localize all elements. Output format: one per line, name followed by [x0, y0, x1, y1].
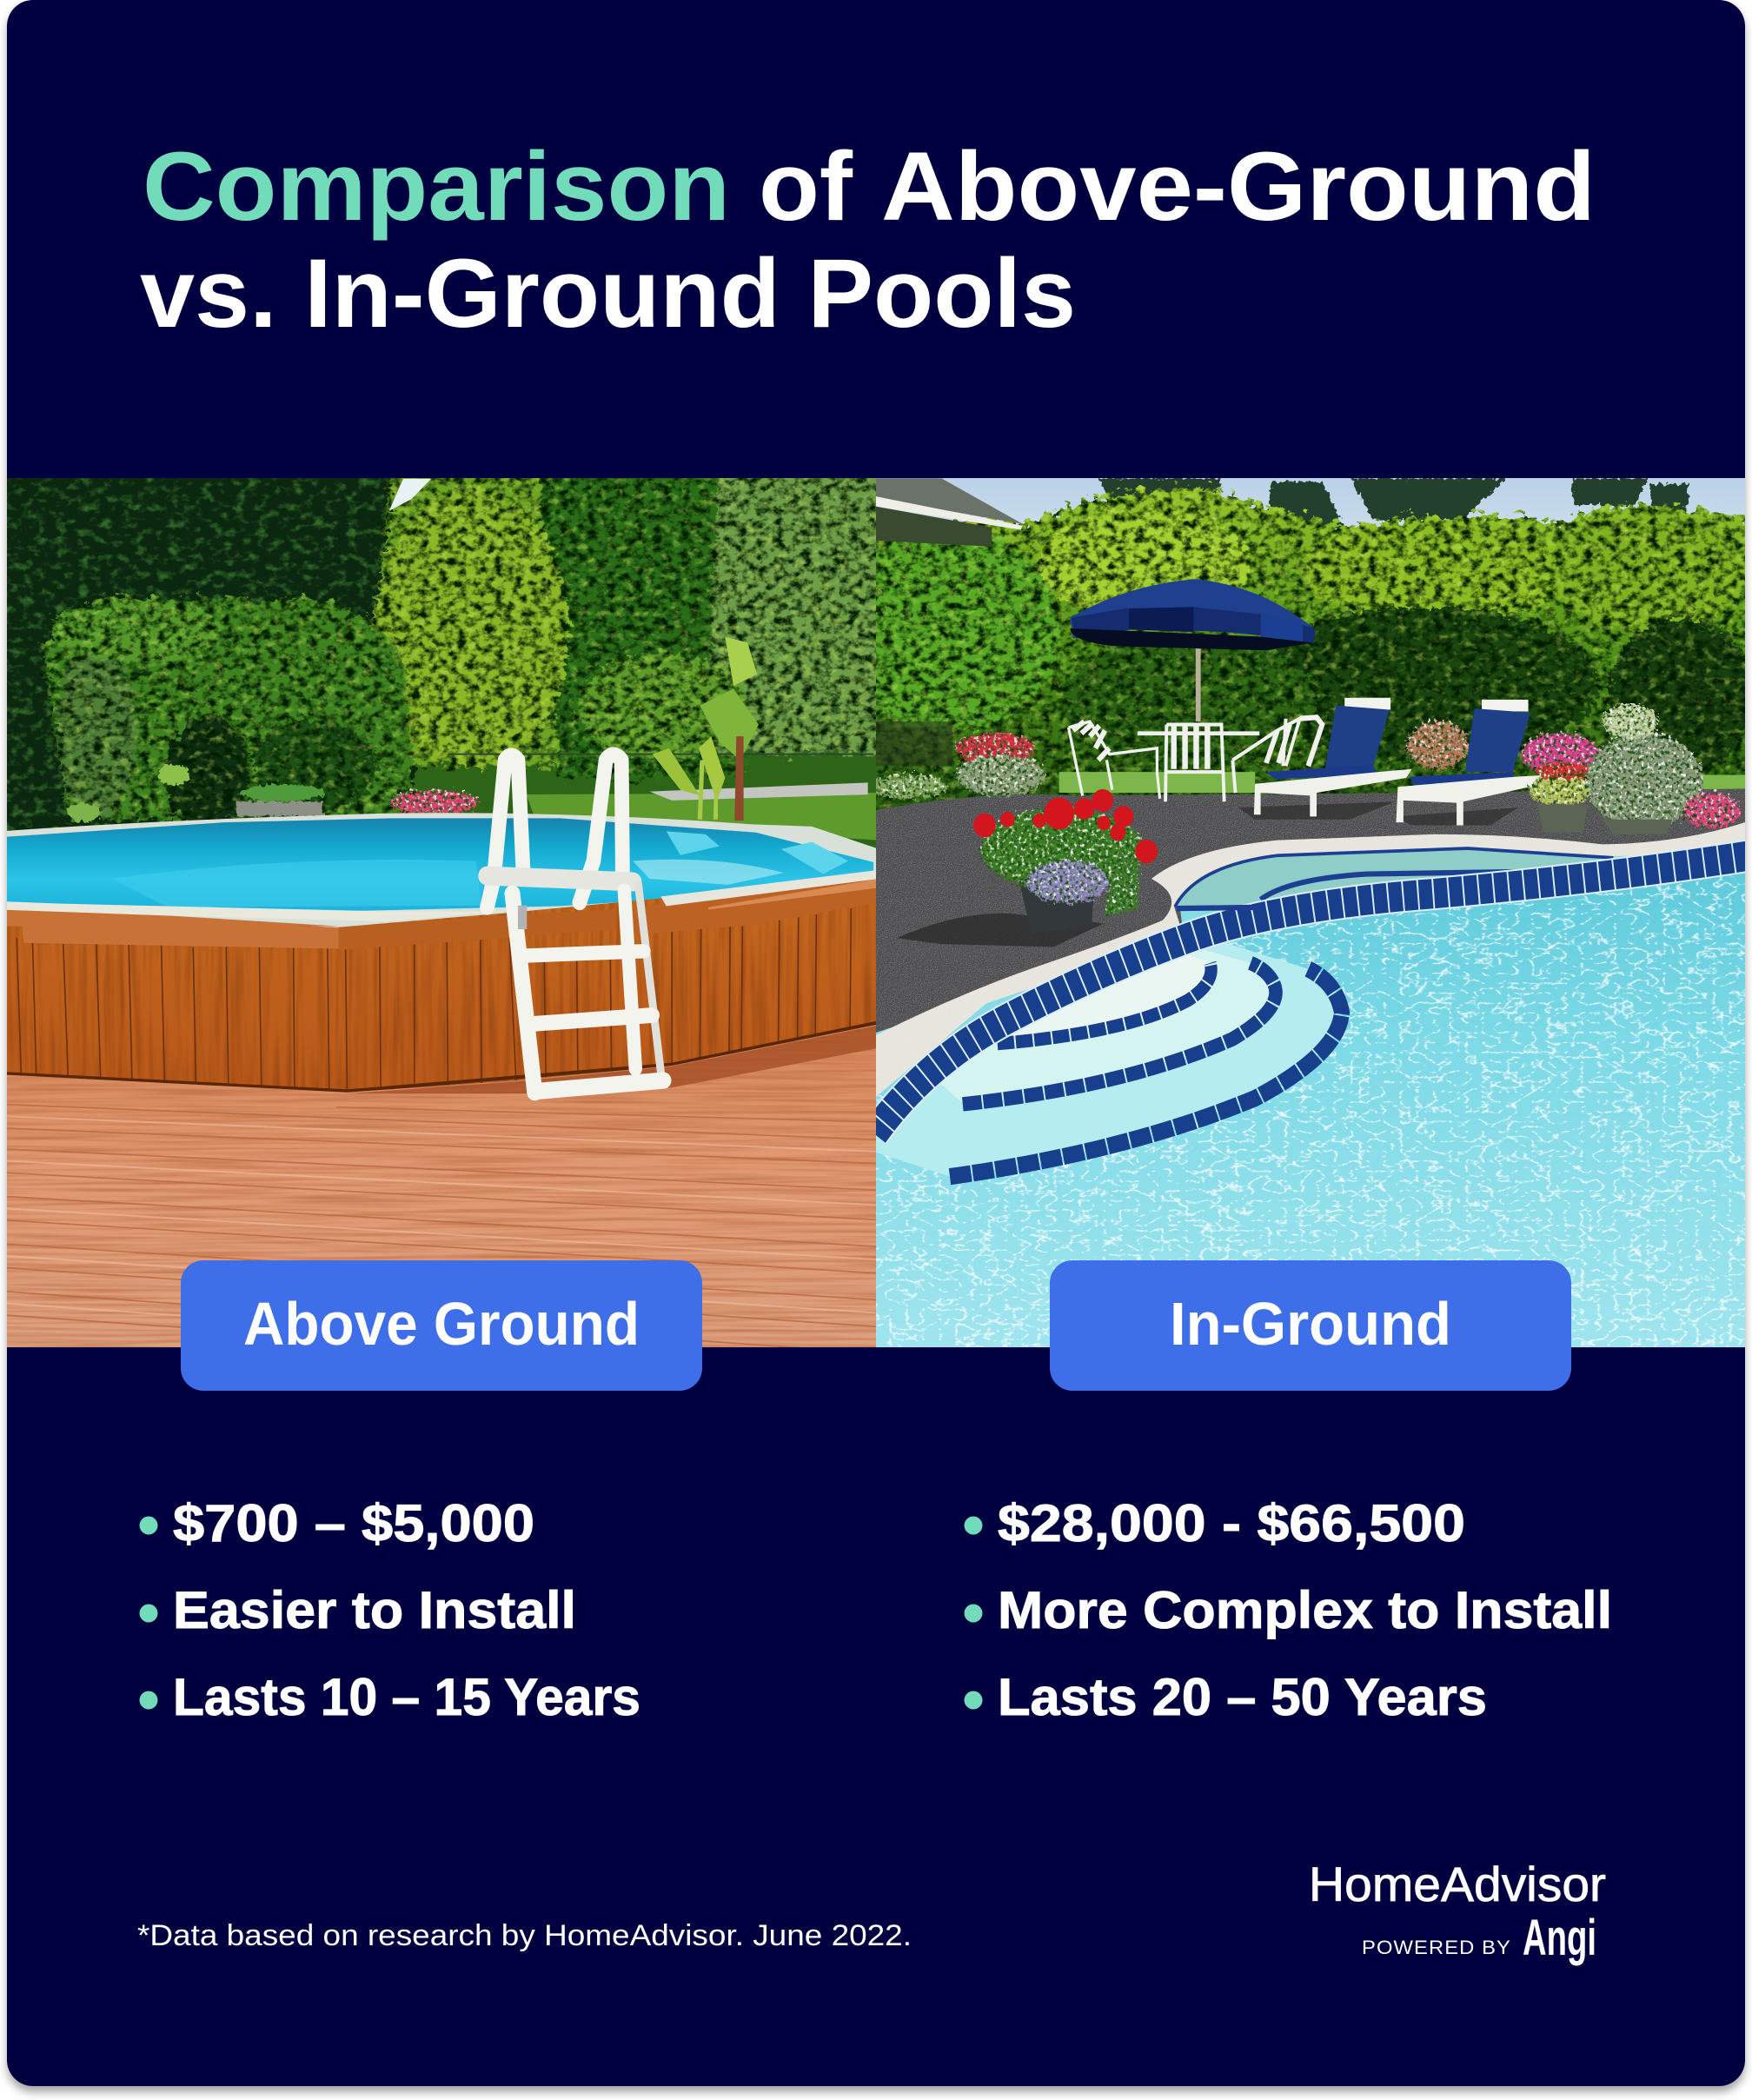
title: [140, 132, 1596, 348]
footnote: *Data based on research by HomeAdvisor. June 2022.: [137, 1919, 912, 1952]
lawn strip: [1059, 772, 1748, 793]
sky gap: [389, 479, 431, 511]
list: above-ground facts: Lasts 10 – 15 Years: [173, 1668, 640, 1726]
garden planters: [1537, 805, 1672, 834]
sky: [874, 469, 1752, 576]
distant trees: [1098, 478, 1689, 528]
list: in-ground facts: $28,000 - $66,500: [998, 1494, 1465, 1552]
title: of: [759, 132, 853, 241]
logo: HomeAdvisor powered by Angi: HomeAdvisor: [1309, 1857, 1606, 1911]
lawn and path: [527, 793, 879, 841]
bright tree canopy: [37, 478, 876, 825]
list: in-ground facts: More Complex to Install: [998, 1581, 1612, 1639]
spa basin: [1174, 849, 1603, 909]
tile band: [874, 855, 1752, 1134]
pool steps: [874, 938, 1342, 1177]
logo: HomeAdvisor powered by Angi: Angi: [1523, 1910, 1596, 1966]
list: above-ground facts: [139, 1494, 640, 1726]
wooden wall: [0, 878, 879, 1093]
deck boards: [0, 1104, 879, 1353]
pool ladder: [488, 754, 663, 1093]
pill label: Above Ground: Above Ground: [243, 1290, 640, 1358]
flower beds: [869, 705, 1739, 828]
patio table and chairs: [1069, 717, 1322, 801]
pill label: In-Ground: [1050, 1260, 1571, 1391]
pool rim far side: [0, 813, 879, 932]
logo: HomeAdvisor powered by Angi: [1309, 1857, 1606, 1966]
photo: in-ground pool with patio, umbrella and loungers: [835, 469, 1752, 1353]
pool water: [874, 861, 1752, 1353]
dark forest backdrop: [7, 478, 418, 831]
logo: HomeAdvisor powered by Angi: POWERED BY: [1362, 1937, 1511, 1958]
title: Above-Ground: [881, 132, 1596, 241]
wall planks: [0, 908, 879, 1095]
wall top boards: [22, 927, 339, 949]
list: in-ground facts: [965, 1494, 1612, 1726]
banana plant: [653, 636, 759, 821]
umbrella: [1071, 579, 1316, 721]
deck: [0, 1024, 879, 1353]
concrete coping: [874, 820, 1752, 1099]
flowers: [67, 764, 478, 821]
roof and house: [874, 478, 1023, 524]
pool water: [0, 818, 873, 912]
list: in-ground facts: Lasts 20 – 50 Years: [998, 1668, 1487, 1726]
red geranium planter: [973, 789, 1158, 934]
title: Comparison: [143, 132, 730, 241]
photo: above-ground pool with wooden surround and ladder: [0, 446, 907, 1353]
list: above-ground facts: Easier to Install: [173, 1581, 576, 1639]
title: vs. In-Ground Pools: [140, 239, 1076, 348]
hedge: [835, 487, 1752, 849]
list: above-ground facts: $700 – $5,000: [173, 1494, 534, 1552]
pill label: In-Ground: In-Ground: [1170, 1290, 1451, 1358]
pill label: Above Ground: [181, 1260, 702, 1391]
sun loungers: [1254, 698, 1549, 826]
patio pavement: [874, 788, 1752, 1033]
